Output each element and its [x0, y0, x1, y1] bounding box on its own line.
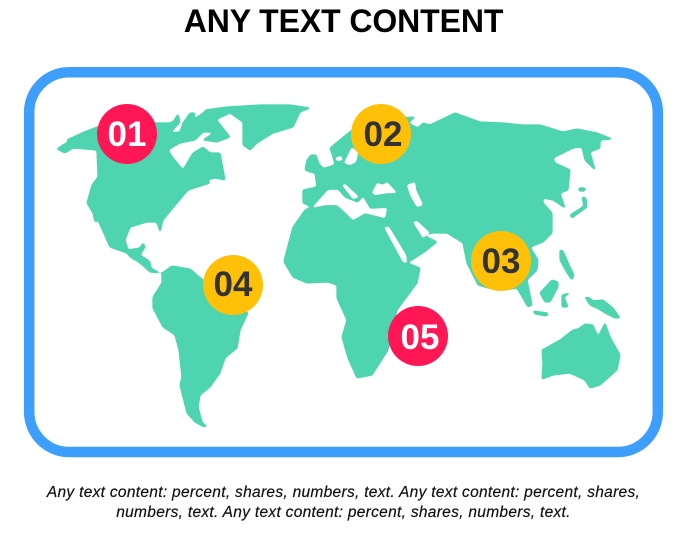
marker 04: 04 [214, 265, 253, 304]
marker 03: 03 [482, 242, 520, 281]
Mediterranean [312, 190, 387, 220]
Eurasia and Africa [284, 113, 612, 378]
inland seas [312, 147, 430, 263]
marker 03 [471, 231, 531, 291]
New Guinea [585, 297, 620, 318]
North America [57, 110, 230, 273]
Kattegat strait [335, 156, 343, 161]
Britain [305, 155, 325, 173]
Caspian [407, 182, 423, 207]
Persian Gulf [413, 221, 430, 238]
marker 04 [203, 255, 263, 315]
Philippines [560, 250, 574, 280]
title: ANY TEXT CONTENT [184, 3, 503, 39]
Java [533, 311, 548, 316]
world map [57, 105, 620, 427]
marker 05 [388, 306, 448, 366]
marker 02: 02 [364, 115, 402, 154]
caption: Any text content: percent, shares, numbers, text. Any text content: percent, shares, [47, 484, 640, 501]
Black Sea [372, 182, 397, 195]
Hokkaido [578, 188, 586, 191]
Sulawesi [562, 293, 570, 307]
Greenland [205, 105, 310, 150]
Red Sea [384, 227, 407, 263]
marker 01: 01 [108, 115, 146, 154]
South America [153, 266, 248, 427]
caption [46, 484, 640, 521]
caption: numbers, text. Any text content: percent, shares, numbers, text. [116, 504, 571, 521]
Adriatic [342, 184, 359, 199]
Borneo [540, 280, 558, 302]
Baltic [344, 147, 358, 165]
Japan [570, 197, 587, 218]
marker 05: 05 [401, 318, 439, 357]
Australia [542, 323, 620, 388]
marker 02 [351, 104, 411, 164]
marker 01 [97, 104, 157, 164]
panel frame [29, 72, 658, 452]
